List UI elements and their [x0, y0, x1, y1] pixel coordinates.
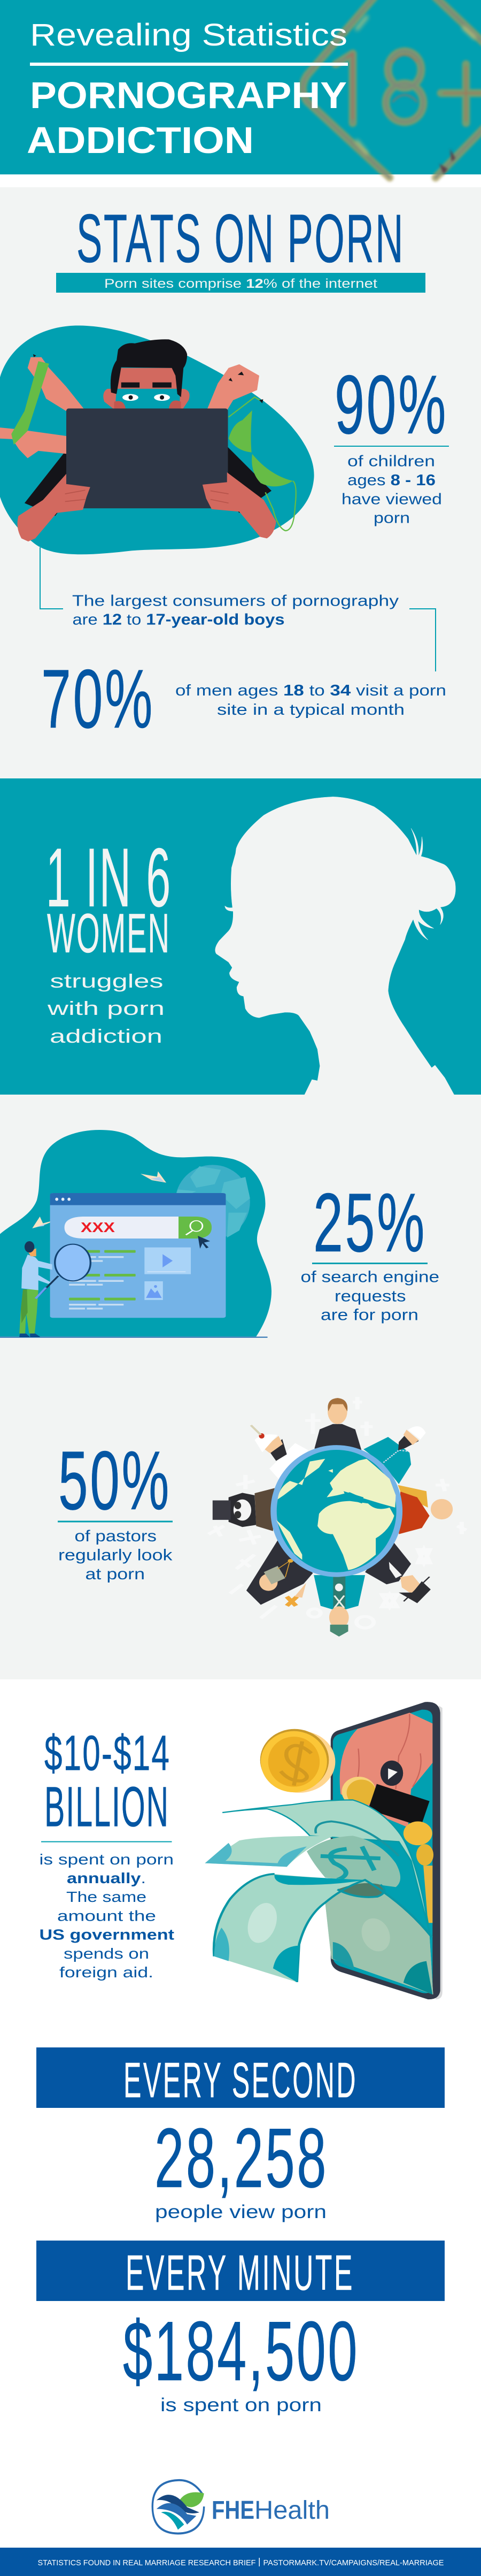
- illustration: browser search: [0, 1130, 271, 1337]
- text: largest consumers: are 12 to 17-year-old boys: [73, 611, 284, 628]
- panel: every second: people view porn: [155, 2202, 327, 2222]
- footer: sources: STATISTICS FOUND IN REAL MARRIAGE RESEARCH BRIEF: [37, 2559, 256, 2567]
- stat: $10-$14 billion: is spent on porn: [40, 1851, 174, 1868]
- stat: $10-$14 billion: The same: [66, 1889, 146, 1905]
- footer: sources: PASTORMARK.TV/CAMPAIGNS/REAL-MARRIAGE: [263, 2559, 444, 2567]
- banner subtitle: Revealing Statistics: [30, 18, 347, 52]
- stat: 50% of pastors: of pastors: [75, 1527, 157, 1545]
- heading: 1 in 6: 1 IN 6: [46, 831, 172, 924]
- stat: $10-$14 billion: $10-$14: [44, 1725, 170, 1780]
- panel: 1 in 6 women: [0, 778, 481, 1095]
- banner title: ADDICTION: [27, 119, 254, 161]
- illustration: globe with clergy: [208, 1397, 466, 1637]
- stat: 90% of children: have viewed: [342, 491, 442, 508]
- panel: every minute: [36, 2241, 445, 2416]
- stat: $10-$14 billion: BILLION: [44, 1775, 169, 1838]
- text: struggles with porn addiction: [47, 970, 165, 1047]
- banner title: [27, 74, 347, 161]
- connector lines: [40, 547, 436, 671]
- silhouette: woman in profile: [215, 797, 455, 1095]
- stat: 70% of men: 70%: [41, 653, 154, 746]
- stat: $10-$14 billion: annually .: [67, 1870, 146, 1886]
- stat: $10-$14 billion: spends on: [64, 1945, 149, 1962]
- stat: $10-$14 billion: US government: [40, 1926, 174, 1943]
- stat: 70% of men: of men ages 18 to 34 visit a porn: [175, 682, 446, 699]
- panel: every minute: is spent on porn: [160, 2395, 322, 2416]
- callout: 12% of the internet: Porn sites comprise 12% of the internet: [104, 277, 377, 291]
- text: struggles with porn addiction: with porn: [47, 997, 165, 1019]
- footer: sources: [0, 2548, 481, 2576]
- 18+ neon sign decoration: [302, 0, 481, 178]
- logo: FHE Health: Health: [254, 2496, 330, 2525]
- stat: 25% of search engine requests: requests: [335, 1287, 406, 1305]
- illustration: money flying from phone: [205, 1702, 443, 1999]
- stat: 50% of pastors: [58, 1434, 173, 1583]
- stat: $10-$14 billion: [40, 1725, 174, 1981]
- stat: 90% of children: of children: [347, 453, 435, 470]
- stat: 90% of children: ages 8 - 16: [347, 472, 436, 489]
- stat: 70% of men: [41, 653, 446, 746]
- logo: FHE Health: [152, 2480, 330, 2534]
- stat: 25% of search engine requests: are for porn: [321, 1306, 418, 1324]
- stat: 25% of search engine requests: [300, 1176, 439, 1324]
- stat: 25% of search engine requests: of search engine: [300, 1268, 439, 1286]
- stat: 50% of pastors: at porn: [86, 1565, 145, 1583]
- text: struggles with porn addiction: struggles: [50, 970, 164, 992]
- text: XXX search query: XXX: [81, 1219, 115, 1235]
- logo: FHE Health: FHE: [212, 2496, 254, 2525]
- stat: $10-$14 billion: foreign aid.: [59, 1964, 153, 1981]
- stat: $10-$14 billion: amount the: [57, 1908, 156, 1924]
- panel: every second: [36, 2047, 445, 2222]
- stat: 90% of children: [334, 358, 449, 526]
- stat: 90% of children: porn: [374, 509, 410, 526]
- banner title: PORNOGRAPHY: [30, 74, 347, 116]
- text: largest consumers: The largest consumers of pornography: [72, 593, 399, 610]
- heading: women: WOMEN: [47, 903, 170, 965]
- panel: header banner: [0, 0, 481, 178]
- panel: every second: 28,258: [154, 2111, 328, 2205]
- illustration: man hiding behind tablet: [0, 326, 314, 554]
- callout: 12% of the internet: [56, 273, 425, 293]
- stat: 70% of men: site in a typical month: [217, 701, 405, 718]
- text: struggles with porn addiction: addiction: [50, 1025, 162, 1047]
- stat: 50% of pastors: regularly look: [58, 1546, 173, 1564]
- text: largest consumers: [72, 593, 399, 628]
- stat: 50% of pastors: 50%: [58, 1434, 171, 1527]
